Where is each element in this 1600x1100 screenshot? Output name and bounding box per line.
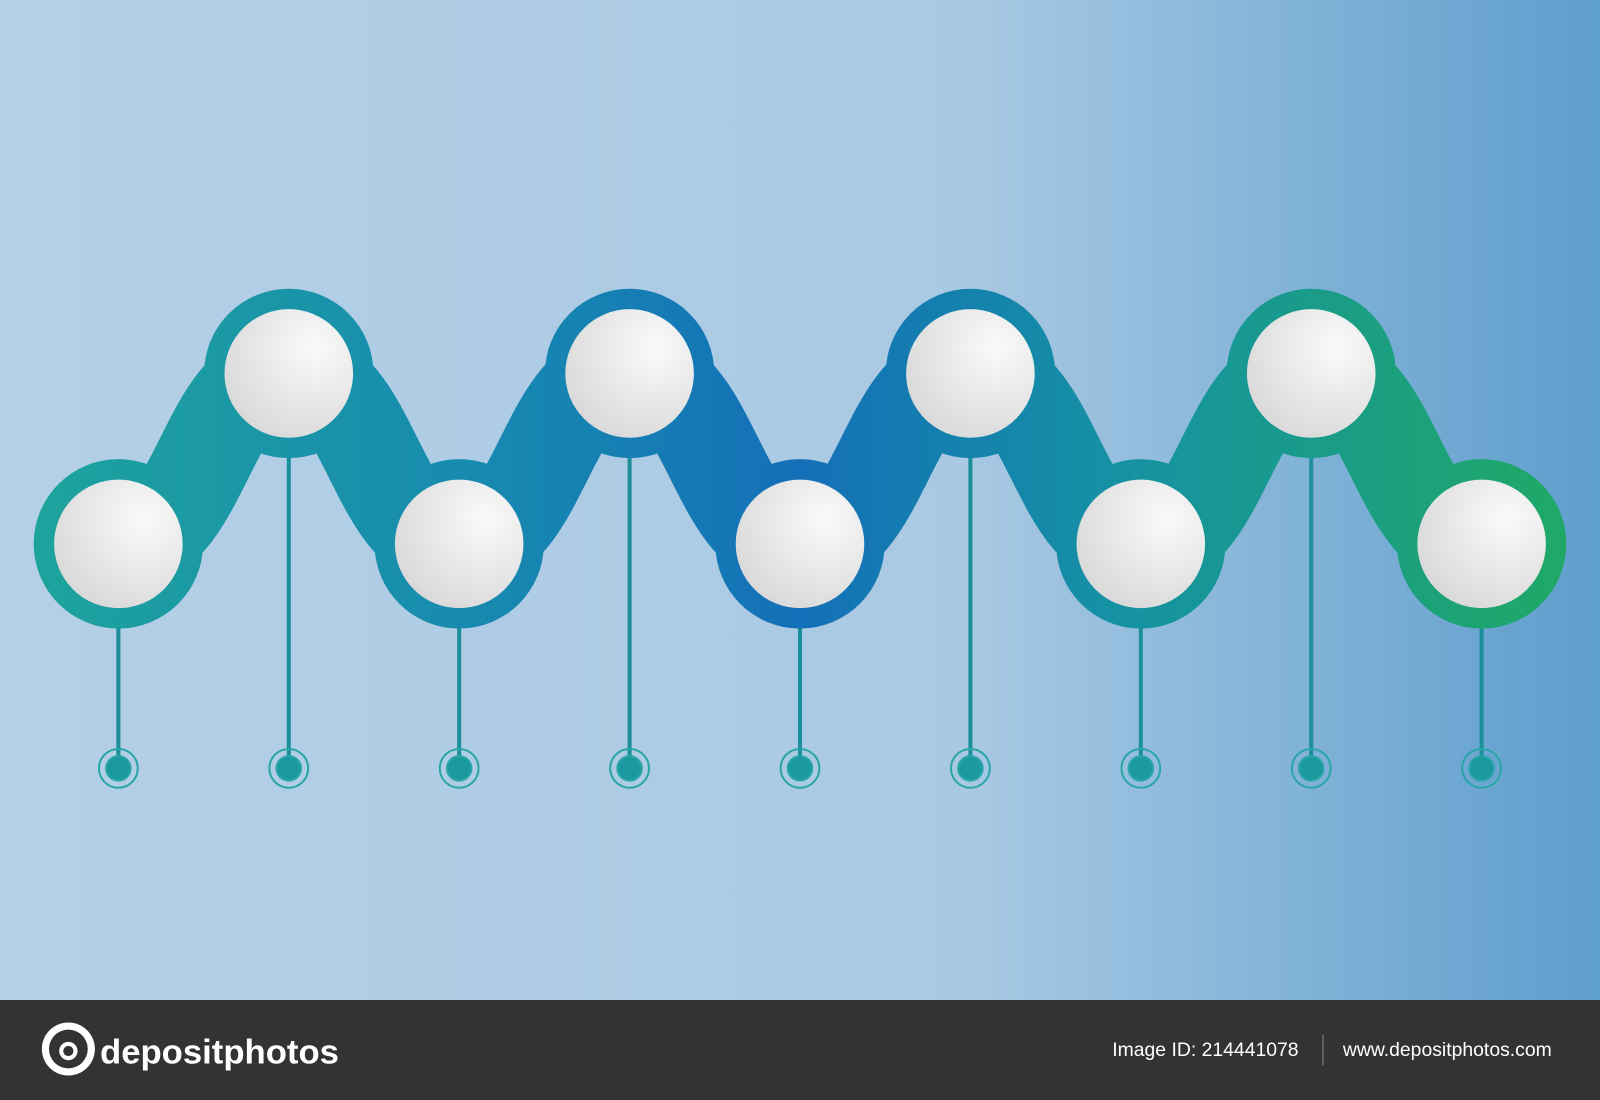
pin dots	[106, 756, 1494, 781]
logo text: depositphotos	[100, 1033, 339, 1071]
url: www.depositphotos.com	[1342, 1039, 1552, 1061]
white discs	[54, 309, 1546, 608]
footer bar	[0, 1000, 1600, 1100]
pins	[118, 373, 1482, 768]
logo icon	[42, 1022, 95, 1076]
wave band	[34, 289, 1566, 629]
image id: Image ID: 214441078	[1112, 1039, 1299, 1061]
